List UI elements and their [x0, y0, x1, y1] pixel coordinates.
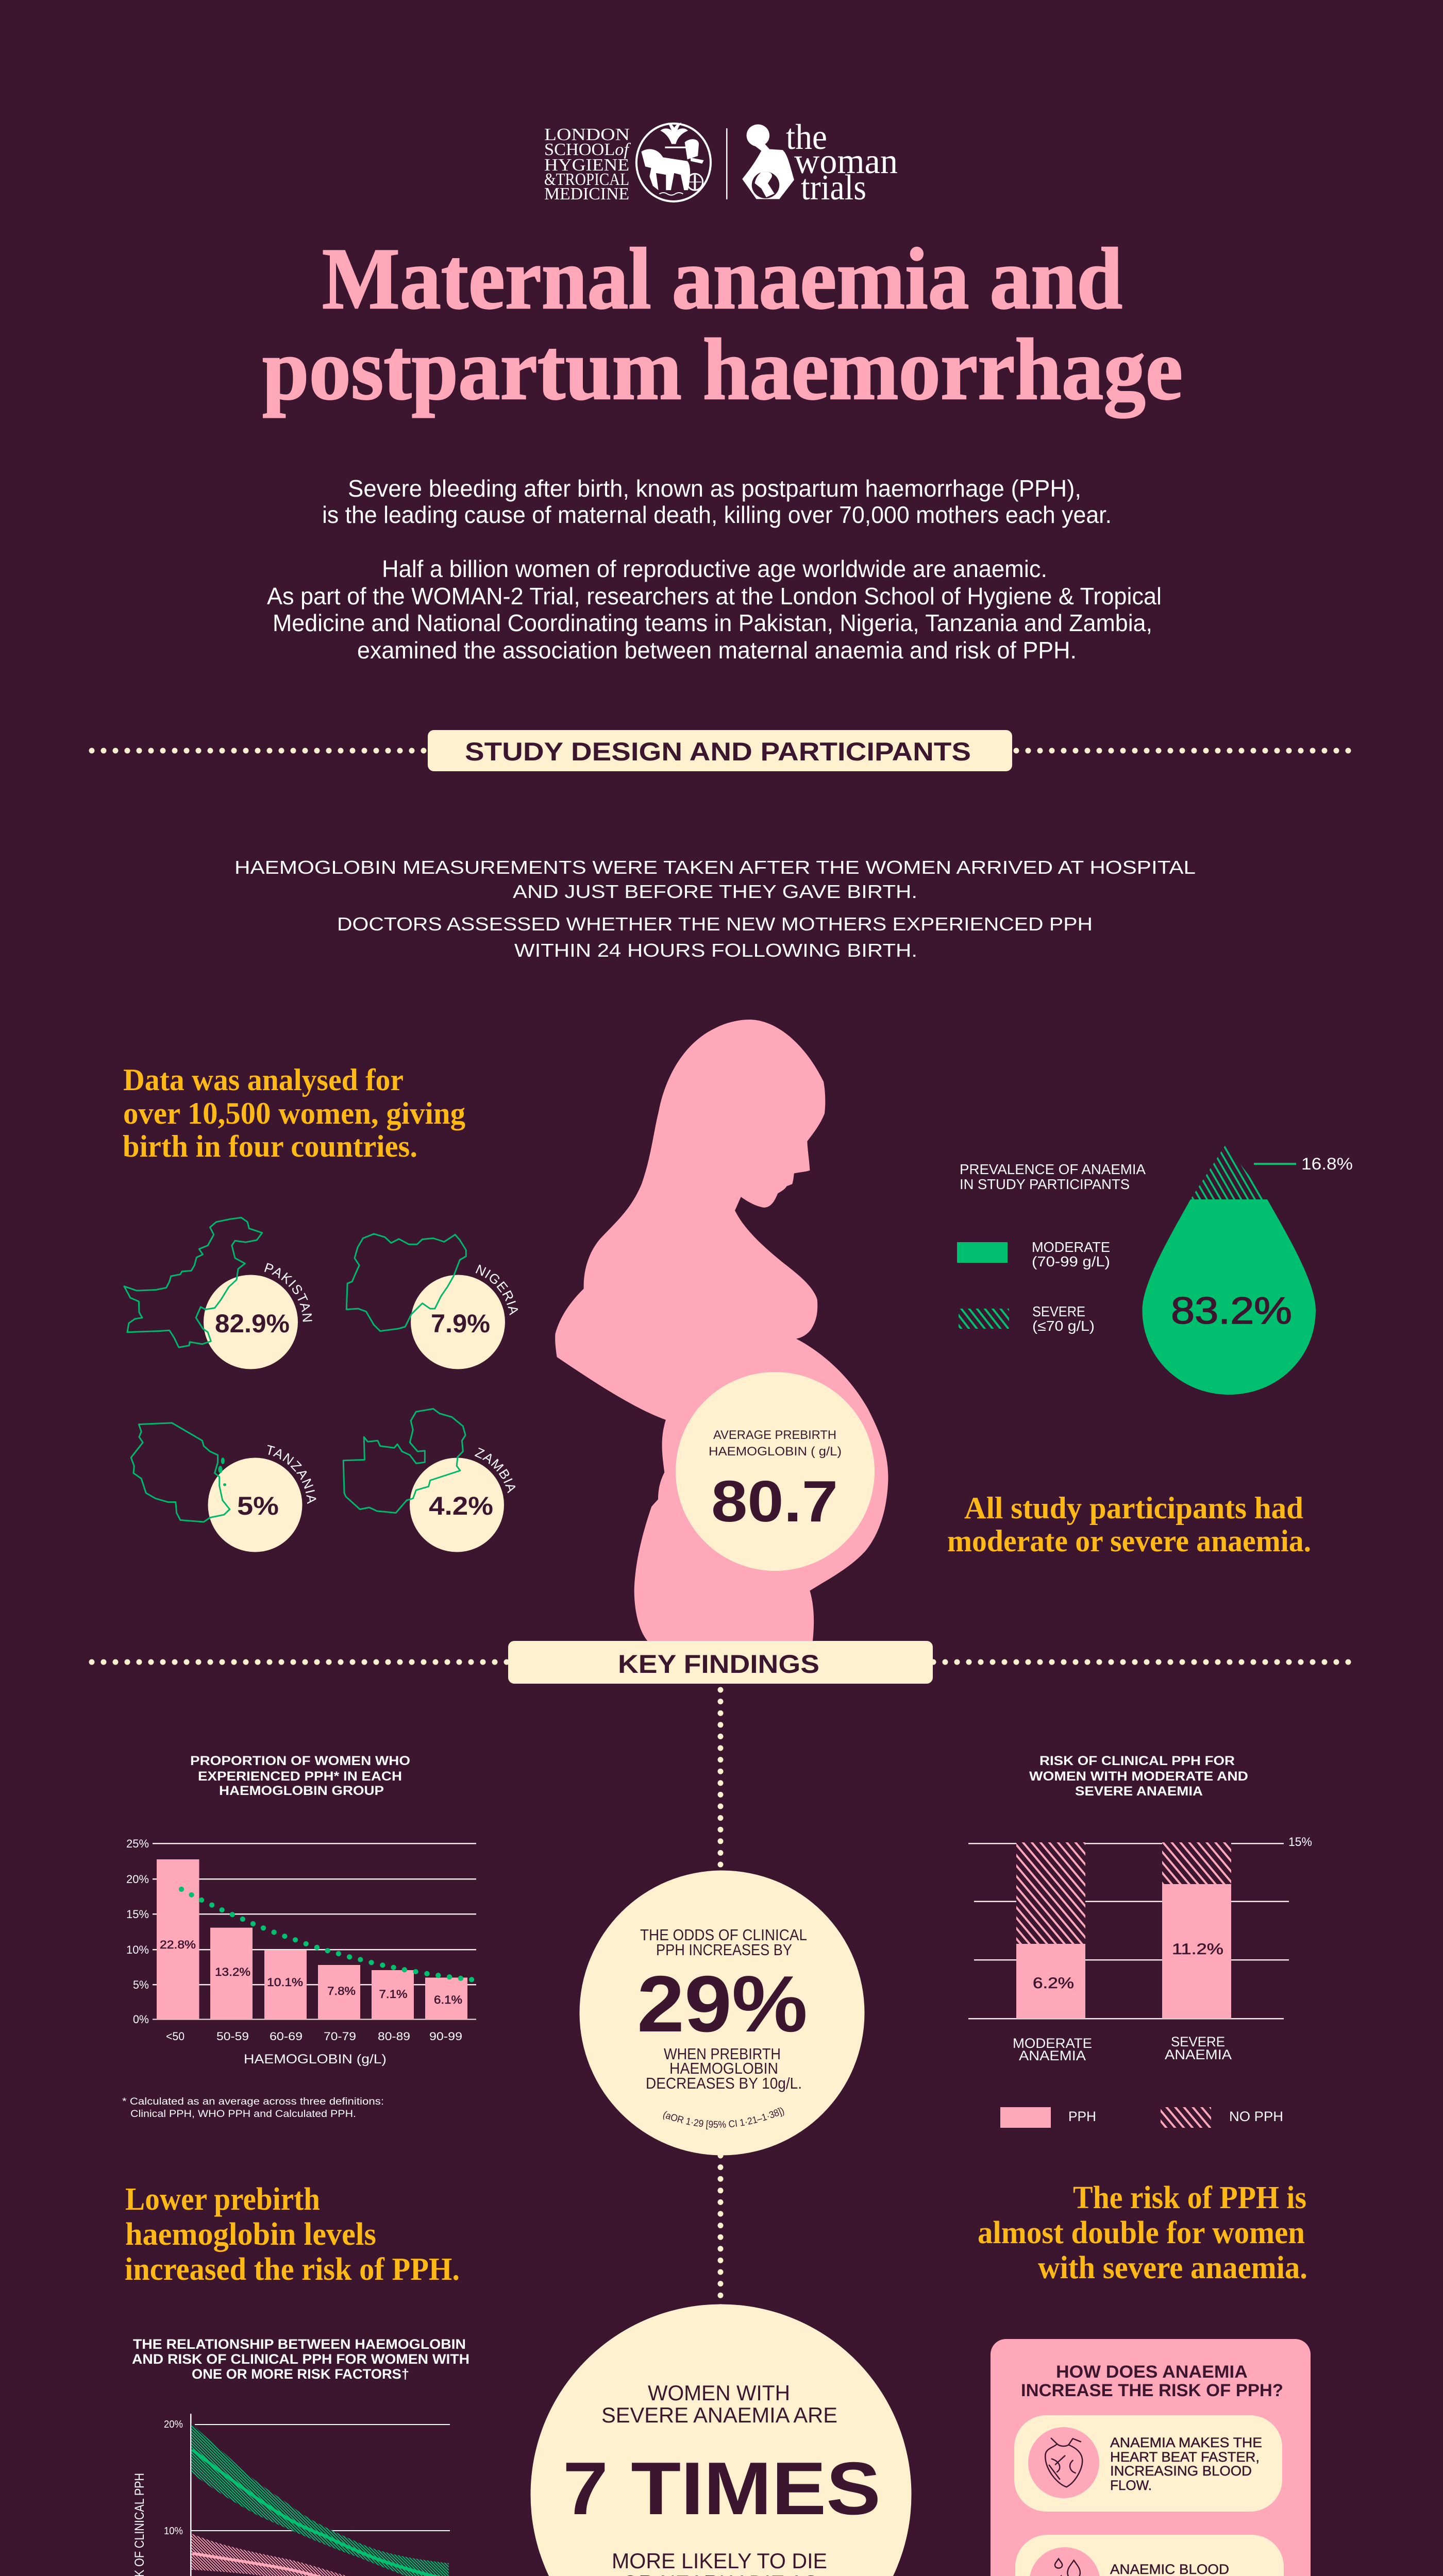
y axis labels: 0%: [133, 2013, 149, 2026]
stacked bar chart: risk by anaemia severity: [968, 1754, 1312, 2128]
icon: blood drops: [1050, 2559, 1080, 2576]
dotted vertical connector: [717, 1690, 724, 2308]
stat: 7 times: SEVERE ANAEMIA ARE: [601, 2403, 837, 2427]
callout: risk almost double: [978, 2180, 1307, 2285]
stat: 7 times: MORE LIKELY TO DIE: [612, 2549, 827, 2573]
footnote: PPH definition: Clinical PPH, WHO PPH and Calculated PPH.: [130, 2109, 356, 2120]
legend: PPH: [1068, 2109, 1096, 2124]
risk band: one or more risk factors: [191, 2424, 449, 2576]
callout: all participants: All study participants had: [964, 1491, 1303, 1525]
stat: 7 times: WOMEN WITH: [648, 2381, 790, 2405]
study description text: WITHIN 24 HOURS FOLLOWING BIRTH.: [514, 940, 917, 961]
bar: severe anaemia: 11.2%: [1172, 1941, 1223, 1958]
map: Pakistan outline: [124, 1217, 262, 1347]
chart: prevalence of anaemia drop: 83.2%: [1171, 1290, 1292, 1332]
study description text: [234, 857, 1196, 961]
intro text: Severe bleeding after birth, known as postpartum haemorrhage (PPH),: [348, 475, 1081, 502]
y axis labels: 10%: [126, 1943, 149, 1956]
chart title: THE RELATIONSHIP BETWEEN HAEMOGLOBIN: [133, 2336, 466, 2352]
category labels: [1013, 2034, 1232, 2063]
category labels: MODERATE: [1013, 2036, 1092, 2051]
x axis labels: 60-69: [270, 2030, 303, 2043]
legend: [1000, 2107, 1283, 2128]
x axis labels: HAEMOGLOBIN (g/L): [244, 2052, 387, 2066]
chart title: [132, 2336, 469, 2382]
bar chart: proportion of women with PPH: [126, 1754, 476, 2066]
callout: risk almost double: with severe anaemia.: [1038, 2250, 1307, 2285]
chart title: WOMEN WITH MODERATE AND: [1029, 1769, 1248, 1784]
x axis labels: 70-79: [324, 2030, 356, 2043]
logo: the woman trials figure: [742, 124, 794, 199]
risk band: no risk factors: [191, 2534, 449, 2576]
x axis labels: 50-59: [216, 2030, 249, 2043]
intro text: Medicine and National Coordinating teams in Pakistan, Nigeria, Tanzania and Zambia,: [273, 609, 1152, 636]
stat: odds increase 29%: THE ODDS OF CLINICAL: [640, 1926, 807, 1944]
logo: the woman trials wordmark: woman: [794, 142, 898, 181]
country: Zambia: 4.2%: [429, 1492, 493, 1520]
stat: odds increase 29%: HAEMOGLOBIN: [669, 2059, 778, 2077]
drop: severe portion: [1190, 1145, 1267, 1199]
country: Tanzania: [130, 1422, 316, 1552]
section header: study design and participants: STUDY DESIGN AND PARTICIPANTS: [465, 737, 971, 766]
legend: moderate: [957, 1239, 1110, 1269]
x axis labels: 80-89: [378, 2030, 410, 2043]
callout: lower haemoglobin: haemoglobin levels: [125, 2217, 376, 2252]
stat: odds increase 29%: [579, 1870, 865, 2156]
chart title: RISK OF CLINICAL PPH FOR: [1039, 1754, 1235, 1768]
legend: severe: SEVERE: [1032, 1303, 1085, 1319]
title: postpartum haemorrhage: [262, 321, 1183, 418]
y axis labels: 20%: [126, 1873, 149, 1886]
callout: lower haemoglobin: [125, 2182, 460, 2287]
country: Nigeria: 7.9%: [431, 1309, 490, 1338]
intro text: is the leading cause of maternal death, killing over 70,000 mothers each year.: [322, 501, 1112, 528]
logo: London School of Hygiene & Tropical Medicine wordmark: LONDON: [544, 125, 630, 144]
callout: 16.8%: 16.8%: [1301, 1155, 1353, 1173]
stat: average prebirth haemoglobin: HAEMOGLOBIN ( g/L): [709, 1445, 842, 1459]
x axis labels: [166, 2030, 462, 2066]
stat: average prebirth haemoglobin: [676, 1372, 875, 1571]
callout: data analysed: [123, 1063, 465, 1163]
bar: severe anaemia: [1162, 1842, 1231, 2019]
panel heading: HOW DOES ANAEMIA: [1056, 2362, 1248, 2382]
country: Zambia: [342, 1408, 515, 1552]
card: heart: [1014, 2415, 1282, 2512]
logo: the woman trials wordmark: [786, 117, 898, 208]
callout: lower haemoglobin: Lower prebirth: [125, 2182, 320, 2217]
bar values: 10.1%: [267, 1976, 303, 1989]
logo: LSHTM roundel: [636, 123, 711, 201]
bar values: [160, 1938, 462, 2006]
bar: moderate anaemia: [1016, 1842, 1085, 2019]
stat: odds increase 29%: DECREASES BY 10g/L.: [646, 2074, 802, 2092]
callout: data analysed: over 10,500 women, giving: [123, 1096, 465, 1130]
card: heart: HEART BEAT FASTER,: [1110, 2449, 1260, 2465]
chart title: [190, 1754, 410, 1798]
section header: study design and participants: [92, 730, 1353, 771]
stacked bar chart: risk by anaemia severity: 15%: [1288, 1835, 1312, 1849]
legend: NO PPH: [1229, 2109, 1283, 2124]
panel: how does anaemia increase the risk: [991, 2339, 1311, 2576]
callout: all participants: [947, 1491, 1311, 1558]
stat: odds increase 29%: PPH INCREASES BY: [656, 1941, 792, 1959]
legend: severe: [959, 1303, 1095, 1334]
logo: the woman trials wordmark: the: [786, 117, 827, 157]
country: Nigeria: NIGERIA: [475, 1264, 518, 1315]
title: [262, 230, 1183, 418]
map: Zambia outline: [343, 1409, 465, 1513]
legend: severe: (≤70 g/L): [1032, 1318, 1095, 1334]
section header: key findings: KEY FINDINGS: [618, 1650, 819, 1679]
panel heading: [1021, 2362, 1283, 2400]
callout: data analysed: Data was analysed for: [123, 1063, 404, 1097]
legend: moderate: (70-99 g/L): [1032, 1253, 1110, 1269]
bars: [157, 1859, 467, 2020]
chart title: ONE OR MORE RISK FACTORS†: [192, 2366, 409, 2382]
logo: London School of Hygiene & Tropical Medicine wordmark: [544, 125, 631, 204]
logo: London School of Hygiene & Tropical Medicine wordmark: &TROPICAL: [544, 170, 629, 189]
stat: 7 times: 7 TIMES: [563, 2447, 881, 2530]
section header: key findings: [92, 1641, 1353, 1684]
callout: risk almost double: The risk of PPH is: [1073, 2180, 1306, 2215]
illustration: pregnant woman silhouette: [555, 1020, 888, 1643]
chart title: EXPERIENCED PPH* IN EACH: [198, 1769, 402, 1784]
stat: odds increase 29%: WHEN PREBIRTH: [664, 2045, 781, 2063]
stat: average prebirth haemoglobin: AVERAGE PREBIRTH: [713, 1428, 836, 1442]
footnote: PPH definition: [122, 2096, 384, 2120]
country: Pakistan: 82.9%: [215, 1309, 290, 1338]
icon: heart: [1045, 2438, 1082, 2487]
panel heading: INCREASE THE RISK OF PPH?: [1021, 2381, 1283, 2400]
drop: moderate portion: [1142, 1199, 1316, 1395]
intro text: examined the association between maternal anaemia and risk of PPH.: [357, 637, 1077, 664]
logo: the woman trials wordmark: trials: [801, 168, 866, 208]
y axis labels: 25%: [126, 1837, 149, 1850]
heading: prevalence: [960, 1161, 1146, 1192]
callout: all participants: moderate or severe anaemia.: [947, 1524, 1311, 1558]
bar values: 22.8%: [160, 1938, 196, 1951]
divider: [726, 128, 728, 199]
card: blood: [1015, 2535, 1284, 2576]
heading: prevalence: PREVALENCE OF ANAEMIA: [960, 1161, 1146, 1177]
chart title: HAEMOGLOBIN GROUP: [219, 1784, 384, 1798]
country: Zambia: ZAMBIA: [474, 1448, 515, 1493]
study description text: AND JUST BEFORE THEY GAVE BIRTH.: [513, 881, 917, 902]
card: heart: INCREASING BLOOD: [1110, 2463, 1252, 2479]
line chart: haemoglobin vs risk of clinical PPH: [132, 2336, 469, 2576]
bar values: 7.1%: [379, 1988, 407, 2001]
intro text: Half a billion women of reproductive age worldwide are anaemic.: [382, 555, 1047, 582]
card: heart: FLOW.: [1110, 2478, 1152, 2493]
title: Maternal anaemia and: [322, 230, 1122, 327]
line chart: haemoglobin vs risk of clinical PPH: 10%: [164, 2526, 183, 2537]
category labels: SEVERE: [1171, 2034, 1225, 2049]
callout: lower haemoglobin: increased the risk of PPH.: [125, 2252, 460, 2287]
x axis labels: 90-99: [429, 2030, 462, 2043]
stat: odds increase 29%: 29%: [637, 1959, 808, 2048]
line chart: haemoglobin vs risk of clinical PPH: 20%: [164, 2419, 183, 2430]
map: Tanzania outline: [131, 1423, 230, 1522]
card: heart: ANAEMIA MAKES THE: [1110, 2435, 1262, 2450]
x axis labels: <50: [166, 2030, 184, 2043]
country: Tanzania: TANZANIA: [267, 1445, 316, 1504]
callout: data analysed: birth in four countries.: [123, 1129, 417, 1163]
country: Tanzania: 5%: [237, 1492, 279, 1520]
intro text: As part of the WOMAN-2 Trial, researchers at the London School of Hygiene & Tropical: [267, 583, 1162, 609]
y axis labels: 15%: [126, 1908, 149, 1921]
bar values: 6.1%: [434, 1993, 462, 2006]
chart title: PROPORTION OF WOMEN WHO: [190, 1754, 410, 1768]
legend: moderate: MODERATE: [1032, 1239, 1110, 1255]
stat: odds increase 29%: (aOR 1·29 [95% CI 1·21–1·38]): [663, 2107, 784, 2130]
chart title: AND RISK OF CLINICAL PPH FOR WOMEN WITH: [132, 2351, 469, 2367]
y axis labels: [126, 1837, 149, 2026]
study description text: DOCTORS ASSESSED WHETHER THE NEW MOTHERS EXPERIENCED PPH: [337, 913, 1093, 935]
chart: prevalence of anaemia drop: [957, 1145, 1353, 1395]
logo: London School of Hygiene & Tropical Medicine wordmark: SCHOOLof: [544, 140, 631, 159]
country: Nigeria: [345, 1233, 518, 1369]
intro text: [267, 475, 1162, 664]
chart title: SEVERE ANAEMIA: [1075, 1784, 1203, 1799]
chart title: [1029, 1754, 1248, 1799]
bar: moderate anaemia: 6.2%: [1033, 1975, 1074, 1992]
country: Pakistan: [123, 1217, 312, 1369]
stat: 7 times: [531, 2304, 911, 2576]
bar values: 13.2%: [215, 1965, 250, 1978]
country: Pakistan: PAKISTAN: [264, 1263, 312, 1322]
category labels: ANAEMIA: [1165, 2047, 1232, 2062]
heading: prevalence: IN STUDY PARTICIPANTS: [960, 1176, 1130, 1192]
logo: London School of Hygiene & Tropical Medicine wordmark: HYGIENE: [544, 156, 629, 175]
stat: average prebirth haemoglobin: 80.7: [711, 1469, 838, 1534]
callout: 16.8%: [1254, 1155, 1353, 1173]
study description text: HAEMOGLOBIN MEASUREMENTS WERE TAKEN AFTER THE WOMEN ARRIVED AT HOSPITAL: [234, 857, 1196, 878]
logos: [544, 117, 898, 208]
logo: London School of Hygiene & Tropical Medicine wordmark: MEDICINE: [544, 184, 629, 204]
y axis labels: 5%: [133, 1978, 149, 1991]
category labels: ANAEMIA: [1019, 2048, 1086, 2063]
callout: risk almost double: almost double for women: [978, 2215, 1305, 2250]
bar values: 7.8%: [327, 1985, 356, 1997]
trend line dots: [179, 1887, 474, 1982]
map: Nigeria outline: [346, 1234, 466, 1331]
footnote: PPH definition: * Calculated as an average across three definitions:: [122, 2096, 384, 2107]
